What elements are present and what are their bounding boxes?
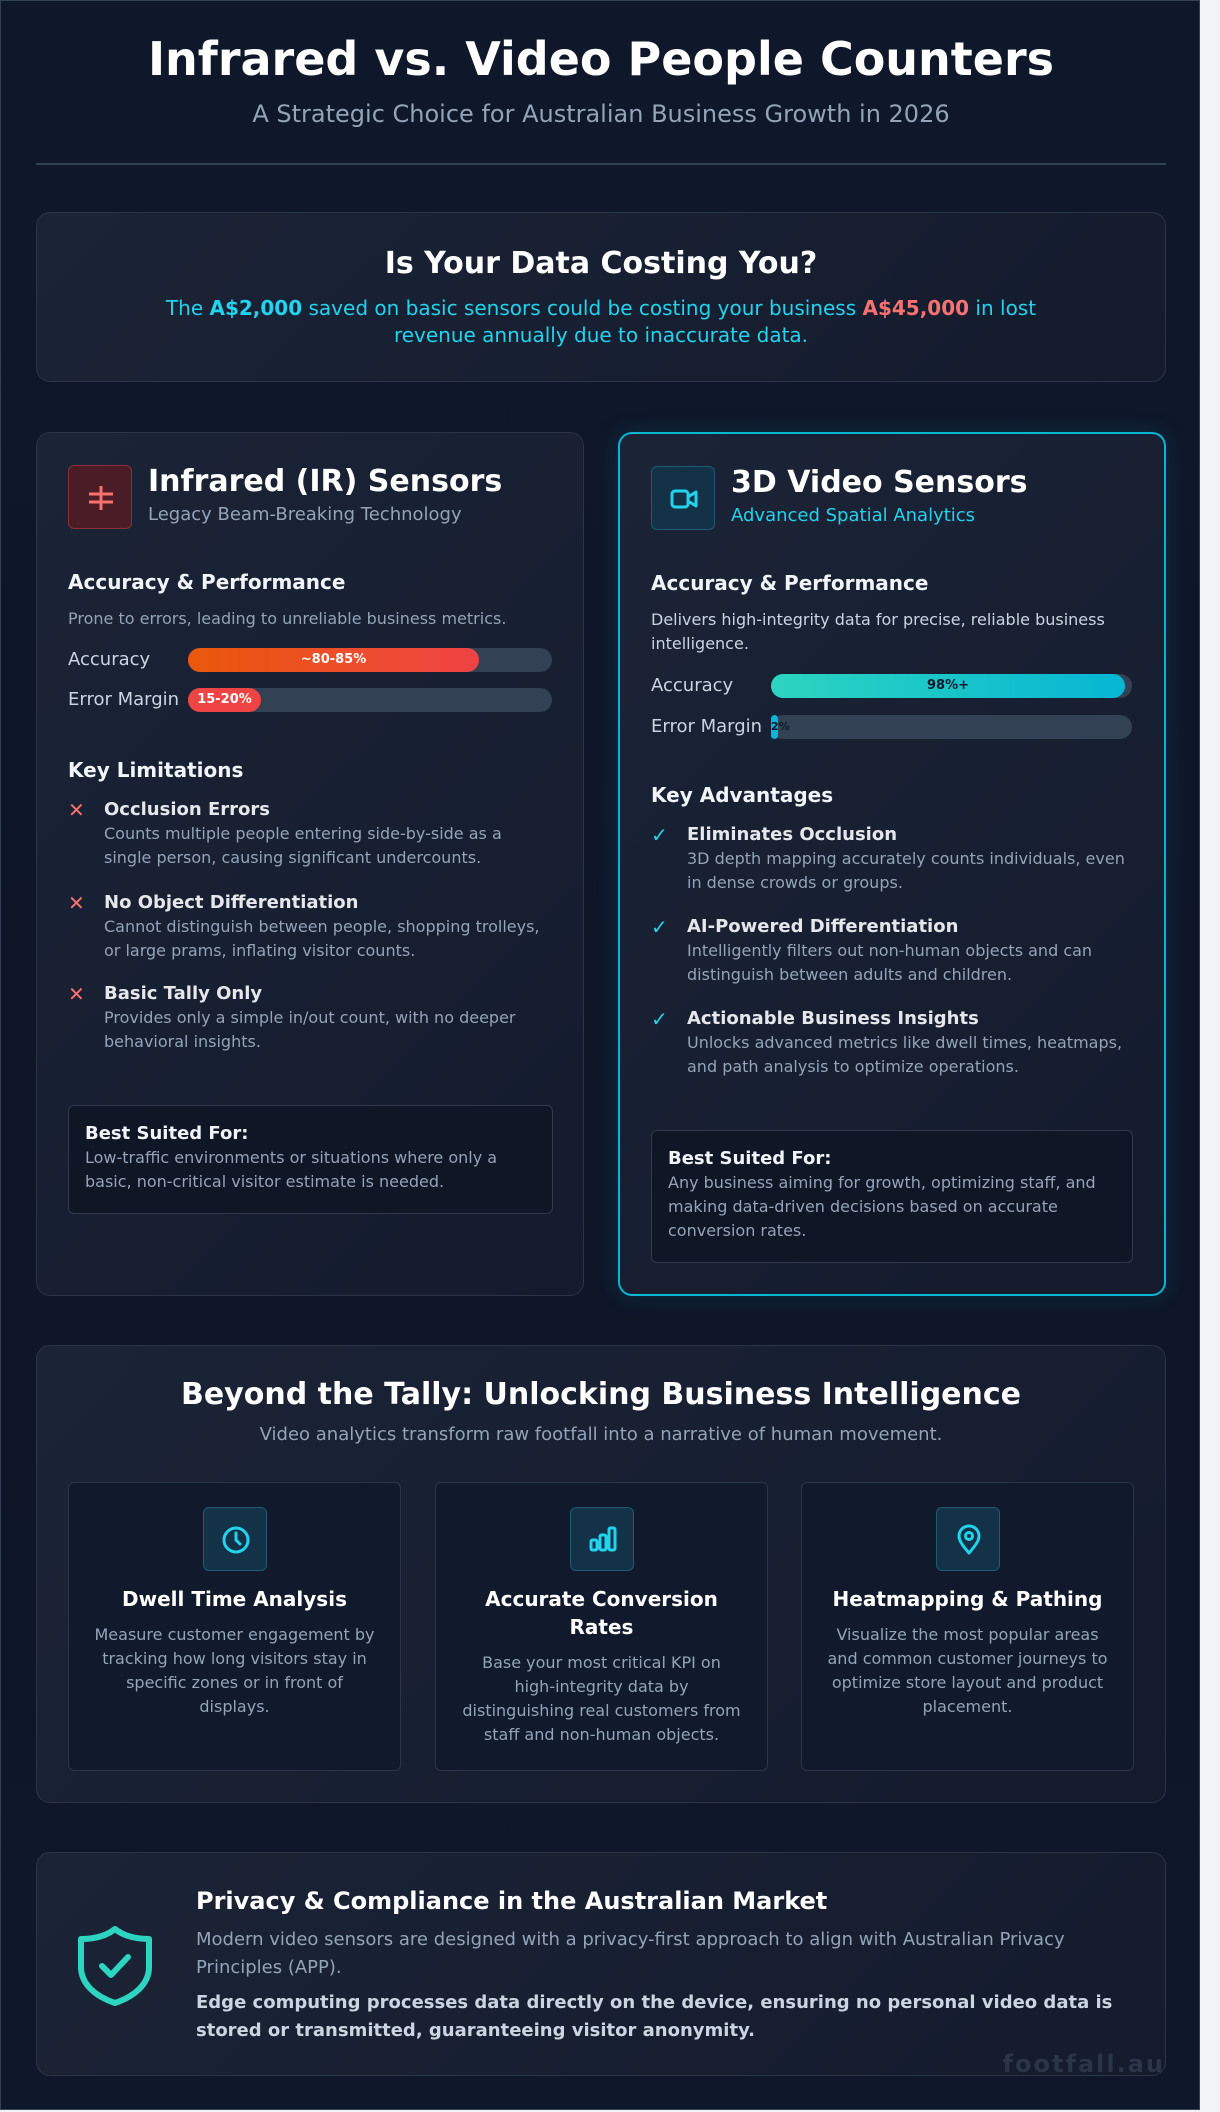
bar chart: IR accuracy: 15-20% <box>197 692 252 707</box>
card: heatmapping: Visualize the most popular areas and common customer journeys to optimize store layout and product placement. <box>828 1625 1108 1716</box>
card: conversion rates: Base your most critical KPI on high‑integrity data by distinguishing real customers from staff and non-human objects. <box>462 1653 741 1744</box>
box: best suited video <box>651 1130 1133 1263</box>
list: limitations: Occlusion Errors <box>104 799 270 820</box>
list: limitations: Cannot distinguish between people, shopping trolleys, or large prams, inflating visitor counts. <box>104 917 540 960</box>
list: advantages: Intelligently filters out non-human objects and can distinguish between adults and children. <box>687 941 1092 984</box>
panel title: 3D Video Sensors <box>731 465 1028 500</box>
card: dwell time: Measure customer engagement by tracking how long visitors stay in specific zones or in front of displays. <box>94 1625 374 1716</box>
icon: bar chart <box>570 1507 634 1571</box>
bar chart: video accuracy: 2% <box>771 720 790 733</box>
card: dwell time <box>68 1482 401 1771</box>
heading: accuracy: Accuracy & Performance <box>68 570 345 594</box>
list: advantages: ✓ <box>651 1007 668 1031</box>
list: limitations: ✕ <box>68 891 85 915</box>
list: limitations: Provides only a simple in/out count, with no deeper behavioral insights. <box>104 1008 515 1051</box>
list: limitations: ✕ <box>68 982 85 1006</box>
heading: key limitations: Key Limitations <box>68 758 243 782</box>
bar chart: IR accuracy: ~80-85% <box>301 652 366 667</box>
bar chart: IR accuracy <box>68 648 552 712</box>
privacy title: Privacy & Compliance in the Australian Market <box>196 1887 827 1915</box>
text: accuracy desc: Prone to errors, leading to unreliable business metrics. <box>68 609 506 628</box>
privacy text: Modern video sensors are designed with a privacy-first approach to align with Australian Privacy Principles (APP). <box>196 1929 1065 1978</box>
panel subtitle: Legacy Beam-Breaking Technology <box>148 504 462 525</box>
callout text: The A$2,000 saved on basic sensors could be costing your business A$45,000 in lost revenue annually due to inaccurate data. <box>166 296 1036 347</box>
box: best suited IR <box>68 1105 553 1214</box>
list: limitations <box>68 798 540 1051</box>
subtitle: A Strategic Choice for Australian Business Growth in 2026 <box>252 100 950 128</box>
panel: infrared sensors <box>36 432 584 1296</box>
bar chart: IR accuracy: Accuracy <box>68 649 150 670</box>
bar chart: IR accuracy: Error Margin <box>68 689 179 710</box>
heading: key advantages: Key Advantages <box>651 783 833 807</box>
list: advantages: AI-Powered Differentiation <box>687 916 958 937</box>
privacy bold text: Edge computing processes data directly on the device, ensuring no personal video data is stored or transmitted, guaranteeing visitor anonymity. <box>196 1992 1112 2041</box>
panel: business intelligence <box>36 1345 1166 1803</box>
box: best suited video: Best Suited For: <box>668 1148 831 1169</box>
card: heatmapping <box>801 1482 1134 1771</box>
bar chart: video accuracy <box>651 674 1132 739</box>
bar chart: video accuracy: Error Margin <box>651 716 762 737</box>
list: advantages: Unlocks advanced metrics like dwell times, heatmaps, and path analysis to optimize operations. <box>687 1033 1122 1076</box>
icon: video camera <box>651 466 715 530</box>
section subtitle: Video analytics transform raw footfall into a narrative of human movement. <box>260 1424 942 1445</box>
bar chart: video accuracy: Accuracy <box>651 675 733 696</box>
icon: shield <box>78 1926 152 2006</box>
box: best suited video: Any business aiming for growth, optimizing staff, and making data-driven decisions based on accurate conversion rates. <box>668 1173 1096 1240</box>
bar chart: video accuracy: 98%+ <box>927 678 969 693</box>
list: limitations: Basic Tally Only <box>104 983 262 1004</box>
card: conversion rates: Accurate Conversion Rates <box>485 1587 718 1639</box>
list: advantages: ✓ <box>651 915 668 939</box>
box: best suited IR: Best Suited For: <box>85 1123 248 1144</box>
card: conversion rates <box>435 1482 768 1771</box>
icon: map pin <box>936 1507 1000 1571</box>
callout heading: Is Your Data Costing You? <box>385 246 817 281</box>
card: dwell time: Dwell Time Analysis <box>122 1587 347 1611</box>
section heading: Beyond the Tally: Unlocking Business Intelligence <box>181 1377 1021 1412</box>
panel: 3D video sensors <box>618 432 1166 1296</box>
list: advantages: Actionable Business Insights <box>687 1008 979 1029</box>
box: best suited IR: Low-traffic environments or situations where only a basic, non-critical visitor estimate is needed. <box>85 1148 497 1191</box>
title: Infrared vs. Video People Counters <box>148 32 1054 86</box>
text: accuracy desc: Delivers high-integrity data for precise, reliable business intelligence. <box>651 610 1105 653</box>
list: advantages: Eliminates Occlusion <box>687 824 897 845</box>
list: limitations: ✕ <box>68 798 85 822</box>
panel title: Infrared (IR) Sensors <box>148 464 502 499</box>
list: limitations: Counts multiple people entering side-by-side as a single person, causing significant undercounts. <box>104 824 502 867</box>
callout: data cost <box>36 212 1166 382</box>
list: advantages <box>651 823 1125 1076</box>
panel: privacy <box>36 1852 1166 2076</box>
list: limitations: No Object Differentiation <box>104 892 358 913</box>
watermark: footfall.au <box>1003 2050 1165 2078</box>
panel subtitle: Advanced Spatial Analytics <box>731 505 975 526</box>
icon: clock <box>203 1507 267 1571</box>
heading: accuracy: Accuracy & Performance <box>651 571 928 595</box>
icon: IR beam <box>68 465 132 529</box>
list: advantages: ✓ <box>651 823 668 847</box>
card: heatmapping: Heatmapping & Pathing <box>833 1587 1102 1611</box>
list: advantages: 3D depth mapping accurately counts individuals, even in dense crowds or groups. <box>687 849 1125 892</box>
